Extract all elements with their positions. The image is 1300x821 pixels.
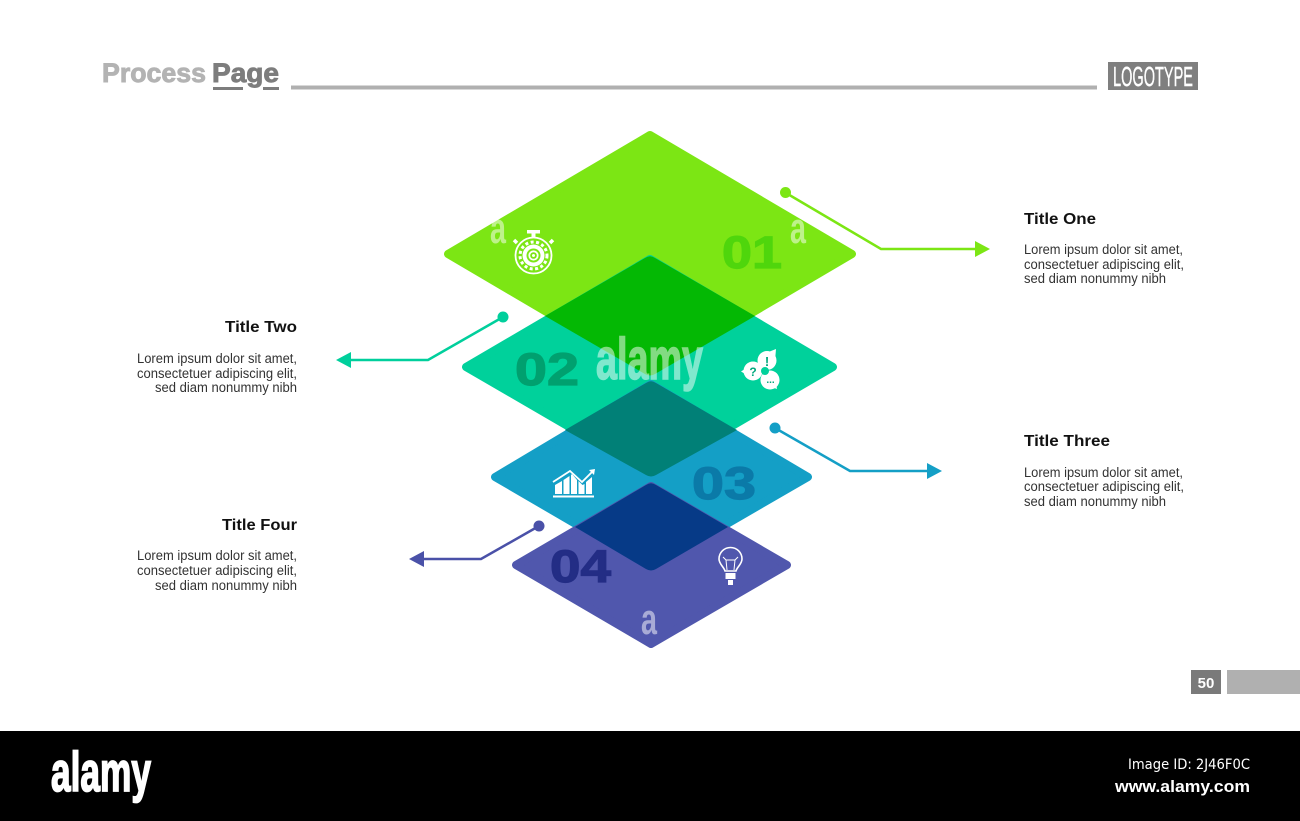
text block: title one: consectetuer adipiscing elit, [1024,257,1184,272]
arrow: title four [409,520,544,567]
text block: title two: Title Two [225,319,297,336]
text block: title two: consectetuer adipiscing elit, [137,366,297,381]
page number [1191,670,1300,694]
text block: title two [137,319,297,395]
text block: title three [1024,433,1184,509]
numbers: 01 [722,227,782,278]
logotype: LOGOTYPE [1113,61,1193,92]
text block: title one [1024,211,1184,286]
header [102,58,1198,92]
numbers: 04 [550,541,611,592]
text block: title three: consectetuer adipiscing elit, [1024,479,1184,494]
layer 4 [516,486,787,644]
watermark: a [641,595,657,644]
numbers [515,227,782,592]
text block: title three: Lorem ipsum dolor sit amet, [1024,465,1183,480]
overlap 1-2 [545,256,755,376]
watermark: alamy [596,327,703,392]
footer bar [0,731,1300,821]
image id: Image ID: 2J46F0C [1128,757,1250,773]
text block: title four: consectetuer adipiscing elit, [137,563,297,578]
watermark: a [490,204,506,253]
watermark: a [790,204,806,253]
icon: stopwatch gear [514,230,553,274]
text block: title three: Title Three [1024,433,1110,450]
watermark [490,204,806,644]
title: Page [212,58,279,88]
arrow: title one [780,187,990,257]
arrow: title three [770,422,942,479]
icon: light bulb [719,548,742,585]
text block: title four: Title Four [222,517,297,534]
icon: bar chart with trend line [553,469,595,498]
text block: title two: Lorem ipsum dolor sit amet, [137,351,297,366]
numbers: 03 [692,458,756,509]
numbers: 02 [515,344,579,395]
page number: 50 [1198,675,1214,692]
arrow: title two [336,312,508,368]
layer 3 [495,384,808,568]
text block: title four: Lorem ipsum dolor sit amet, [137,548,297,563]
layer 2 [466,259,833,474]
text block: title four [137,517,297,593]
icon: speech bubbles: ! [765,354,769,369]
icon: speech bubbles: ... [766,375,775,386]
text block: title one: sed diam nonummy nibh [1024,271,1166,286]
logotype [1108,61,1198,92]
text block: title one: Title One [1024,211,1096,228]
overlap 3-4 [575,483,728,570]
text block: title one: Lorem ipsum dolor sit amet, [1024,242,1183,257]
overlap 2-3 [565,381,737,476]
layer 1 [448,135,852,373]
website: www.alamy.com [1114,778,1250,796]
layered diamonds [448,135,852,644]
text block: title two: sed diam nonummy nibh [155,380,297,395]
footer logo: alamy [51,740,151,803]
icon: speech bubbles: ? [749,365,757,379]
title [102,58,279,90]
text block: title four: sed diam nonummy nibh [155,578,297,593]
title: Process [102,58,206,88]
text block: title three: sed diam nonummy nibh [1024,494,1166,509]
icon: speech bubbles [741,349,780,390]
